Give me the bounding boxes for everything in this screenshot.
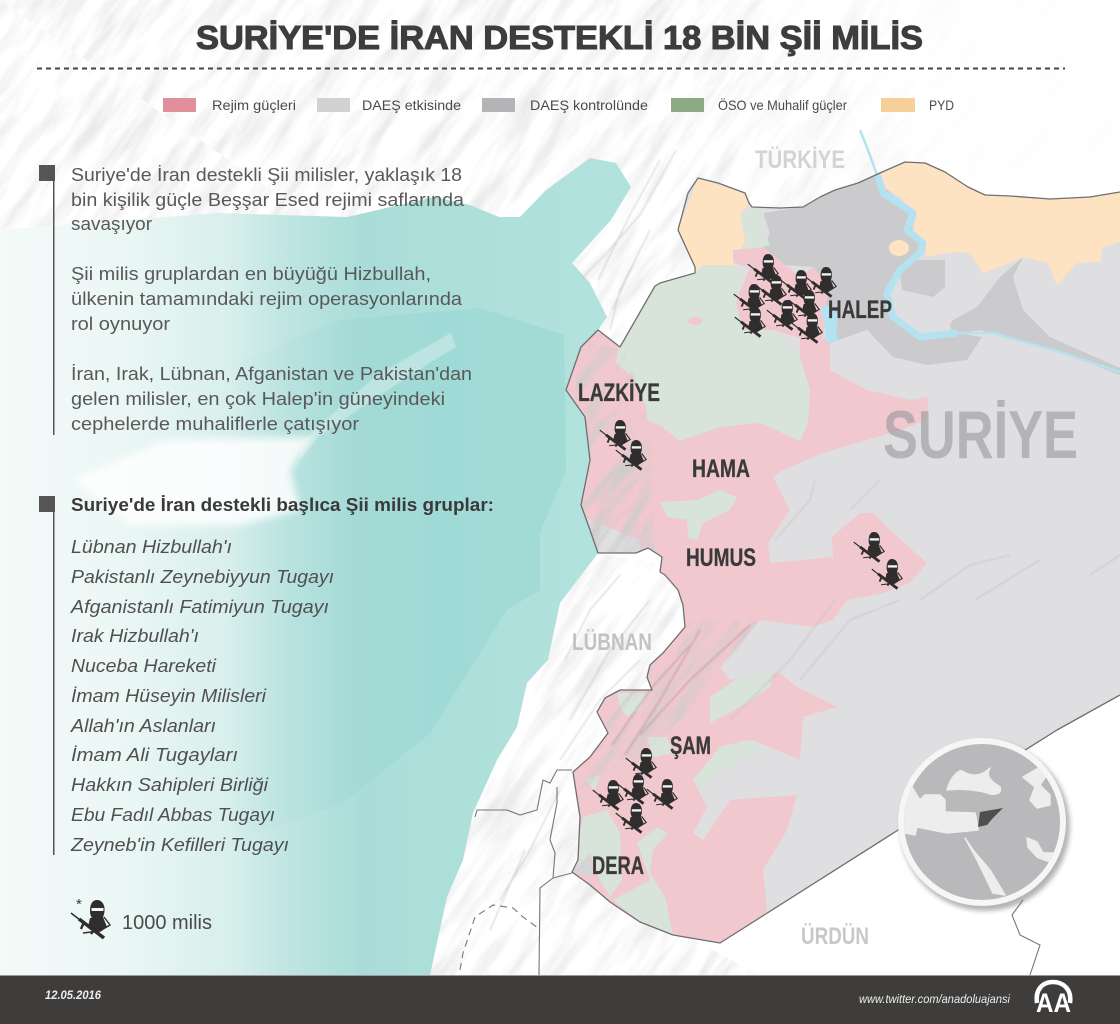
- land relief: ridges: [490, 150, 676, 930]
- list: militia groups: Afganistanlı Fatimiyun Tugayı: [70, 596, 329, 617]
- list: militia groups: [70, 536, 334, 855]
- social url: www.twitter.com/anadoluajansi: [859, 992, 1010, 1006]
- list: militia groups: Ebu Fadıl Abbas Tugayı: [71, 804, 275, 825]
- text block: summary: ülkenin tamamındaki rejim operasyonlarında: [71, 288, 463, 309]
- city label: HUMUS: HUMUS: [686, 544, 756, 572]
- list: militia groups: İmam Hüseyin Milisleri: [71, 685, 267, 706]
- river: upper Fırat: [860, 130, 877, 175]
- icon key: 1000 milis: 1000 milis: [122, 912, 212, 934]
- title: SURİYE'DE İRAN DESTEKLİ 18 BİN Şİİ MİLİS: [196, 19, 923, 56]
- text block: summary: gelen milisler, en çok Halep'in güneyindeki: [71, 388, 445, 409]
- legend: PYD: PYD: [929, 97, 954, 113]
- list: militia groups: Allah'ın Aslanları: [70, 715, 216, 736]
- list: militia groups: İmam Ali Tugayları: [71, 744, 238, 765]
- country label: TÜRKİYE: TÜRKİYE: [755, 145, 845, 174]
- date: 12.05.2016: [45, 990, 102, 1002]
- text block: summary: cephelerde muhaliflerle çatışıyor: [71, 413, 359, 434]
- legend: [163, 96, 954, 113]
- list: militia groups: Pakistanlı Zeynebiyyun Tugayı: [71, 566, 334, 587]
- legend: DAEŞ etkisinde: [317, 97, 461, 113]
- list: militia groups: Zeyneb'in Kefilleri Tugayı: [70, 834, 289, 855]
- Syria highlight: [978, 808, 1003, 827]
- section bar: summary: [39, 165, 55, 435]
- title divider: [37, 68, 1065, 70]
- text block: summary: rol oynuyor: [71, 313, 170, 334]
- text block: summary: savaşıyor: [71, 213, 152, 234]
- lake near Halep: [820, 306, 840, 342]
- legend: DAEŞ kontrolünde: [482, 97, 648, 113]
- legend: DAEŞ kontrolünde: DAEŞ kontrolünde: [530, 97, 648, 113]
- region: ÖSO north: [694, 265, 702, 275]
- list: militia groups: Nuceba Hareketi: [71, 655, 217, 676]
- country label: ÜRDÜN: ÜRDÜN: [801, 923, 869, 950]
- footer bar: [0, 975, 1120, 1024]
- militia icons: Halep: [734, 254, 836, 343]
- text block: summary: Suriye'de İran destekli Şii milisler, yaklaşık 18: [71, 164, 462, 185]
- syria border outline: [566, 162, 1120, 943]
- sea: [0, 158, 631, 975]
- legend: ÖSO ve Muhalif güçler: ÖSO ve Muhalif güçler: [718, 96, 847, 113]
- militia icons: Şam: [593, 748, 677, 833]
- region: DAEŞ kontrolünde: [763, 173, 1120, 375]
- legend: ÖSO ve Muhalif güçler: [671, 96, 847, 113]
- text block: summary: bin kişilik güçle Beşşar Esed rejimi saflarında: [71, 189, 465, 210]
- relief on DAEŞ zones: [730, 480, 1120, 720]
- syria base: DAEŞ influence: [566, 162, 1120, 943]
- militia icons: Lazkiye: [600, 420, 646, 470]
- country label: LÜBNAN: LÜBNAN: [572, 629, 652, 656]
- legend: Rejim güçleri: Rejim güçleri: [212, 97, 296, 113]
- region: ÖSO patches: [573, 490, 773, 935]
- legend: DAEŞ etkisinde: DAEŞ etkisinde: [362, 97, 461, 113]
- city label: DERA: DERA: [592, 852, 644, 880]
- ridges near Şam: [612, 625, 750, 755]
- neighbouring borders: [460, 770, 1040, 975]
- legend: Rejim güçleri: [163, 97, 296, 113]
- city label: HAMA: HAMA: [692, 455, 750, 483]
- text block: summary: Şii milis gruplardan en büyüğü Hizbullah,: [71, 263, 431, 284]
- list: militia groups: Irak Hizbullah'ı: [71, 625, 199, 646]
- legend: PYD: [881, 97, 954, 113]
- city label: LAZKİYE: LAZKİYE: [578, 379, 660, 407]
- locator globe: [898, 738, 1070, 911]
- relief on regime and mountain zones: [575, 340, 760, 790]
- heading: groups: Suriye'de İran destekli başlıca Şii milis gruplar:: [71, 494, 494, 515]
- text block: summary: İran, Irak, Lübnan, Afganistan ve Pakistan'dan: [71, 363, 472, 384]
- syria control regions: [540, 158, 1120, 950]
- icon key: 1000 milis: [71, 896, 212, 938]
- background: terrain texture: [0, 0, 870, 975]
- city label: ŞAM: ŞAM: [670, 732, 711, 760]
- list: militia groups: Hakkın Sahipleri Birliği: [71, 774, 269, 795]
- section bar: groups: [39, 496, 55, 855]
- river: Fırat: [877, 173, 1120, 372]
- militia icons: Humus: [854, 532, 902, 589]
- text block: summary: [71, 164, 472, 434]
- icon key: 1000 milis: *: [76, 896, 82, 913]
- region: PYD: [678, 158, 1120, 285]
- list: militia groups: Lübnan Hizbullah'ı: [71, 536, 232, 557]
- city label: HALEP: HALEP: [828, 296, 892, 324]
- logo: AA: AA: [1036, 988, 1071, 1018]
- region: Rejim güçleri: [540, 247, 928, 950]
